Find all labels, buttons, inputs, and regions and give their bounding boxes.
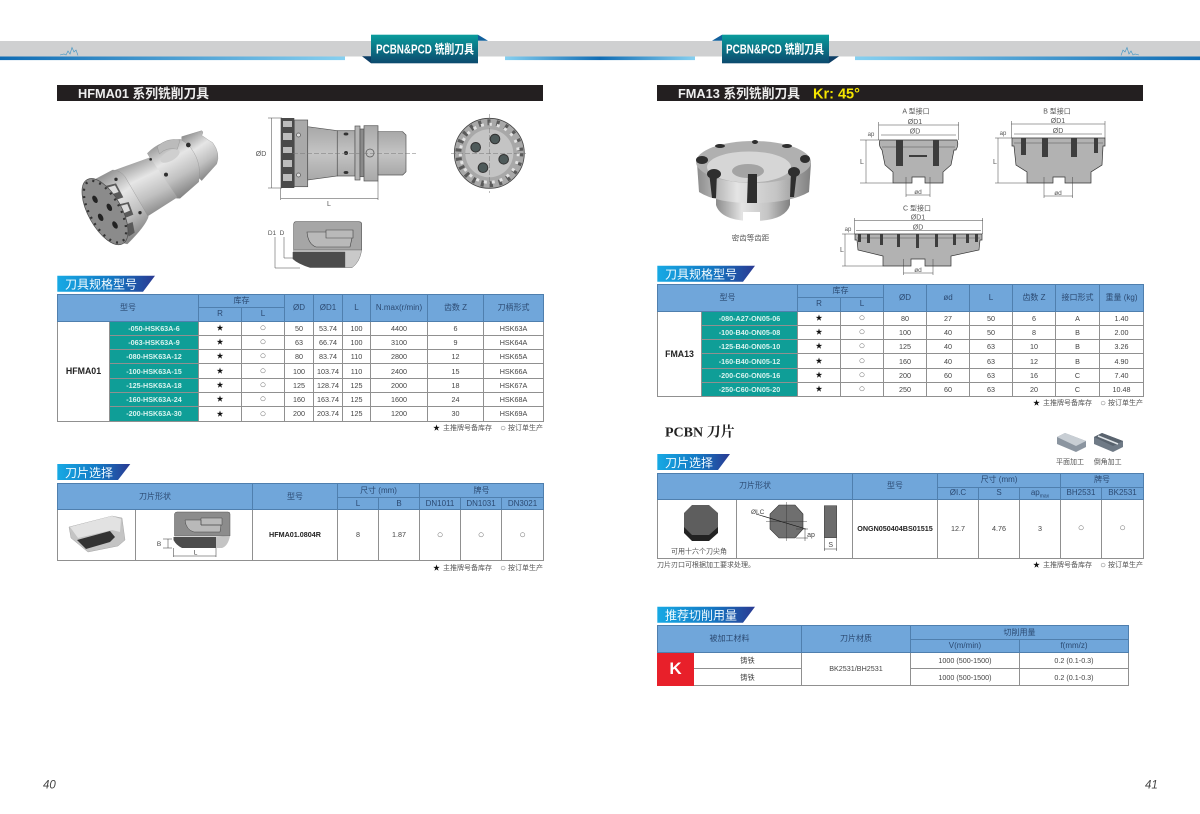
table: recommended cutting parameters [657, 625, 1129, 686]
table: HFMA01 tool specifications: 2000 [391, 381, 407, 390]
table: FMA13 tool specifications: B [1075, 357, 1080, 366]
table: HFMA01 tool specifications: 80 [295, 352, 303, 361]
table: FMA13 tool specifications: ○ [859, 326, 865, 338]
page number 41: 41 [1145, 780, 1158, 792]
table: PCBN insert selection: 12.7 [951, 524, 965, 533]
diagram: HFMA01 insert with B and L dimensions [157, 512, 230, 557]
table: HFMA01 tool specifications: -100-HSK63A-15 [126, 367, 182, 376]
table: FMA13 tool specifications: -080-A27-ON05-06 [719, 314, 780, 323]
table: HFMA01 tool specifications: 100 [350, 338, 362, 347]
table: HFMA01 insert selection: 型号 [287, 492, 303, 500]
diagram: HFMA01 insert detail: D1 [268, 230, 277, 237]
diagram: type B interface: ØD1 [1051, 118, 1065, 125]
diagram: type C interface: ØD1 [911, 214, 925, 222]
table: HFMA01 tool specifications: 6 [454, 324, 458, 333]
table: HFMA01 tool specifications: 18 [452, 381, 460, 390]
table: recommended cutting parameters: 铸铁 [740, 673, 755, 682]
legend: stock note, table 2: ★ 主推牌号备库存 ○ 按订单生产 [433, 563, 543, 574]
header tab: right page [712, 35, 839, 63]
table: HFMA01 tool specifications: 刀柄形式 [498, 303, 530, 312]
table: recommended cutting parameters: 刀片材质 [840, 634, 872, 643]
table: FMA13 tool specifications: 50 [987, 328, 995, 337]
table: HFMA01 tool specifications: -200-HSK63A-30 [126, 409, 182, 418]
table: HFMA01 tool specifications: L [354, 303, 359, 312]
table: HFMA01 tool specifications: ★ [216, 396, 224, 403]
table: HFMA01 tool specifications: HSK66A [500, 367, 527, 376]
table: FMA13 tool specifications: 2.00 [1114, 328, 1128, 337]
table: HFMA01 tool specifications: HFMA01 [66, 366, 101, 376]
photo: HFMA01 milling tool [73, 131, 218, 252]
table: FMA13 tool specifications: ★ [816, 386, 822, 393]
table: FMA13 tool specifications: 1.40 [1114, 314, 1128, 323]
table: FMA13 tool specifications: 63 [987, 371, 995, 380]
table: HFMA01 tool specifications: ★ [216, 382, 224, 389]
table: FMA13 tool specifications: ★ [816, 372, 822, 379]
header tab: left page: PCBN&PCD 铣削刀具 [376, 42, 474, 56]
diagram: HFMA01 side view with dimensions: ØD [256, 151, 266, 158]
diagram: HFMA01 side view with dimensions: L [327, 201, 331, 208]
table: HFMA01 tool specifications: R [217, 309, 223, 318]
heading: PCBN inserts: PCBN 刀片 [665, 424, 735, 440]
icon: chamfered edge insert: 倒角加工 [1094, 457, 1122, 466]
table: PCBN insert selection: 尺寸 (mm) [981, 475, 1017, 484]
section label: tool spec, right: 刀具规格型号 [665, 266, 737, 282]
header tab: right page: PCBN&PCD 铣削刀具 [726, 42, 824, 56]
diagram: octagonal insert top and side view: S [828, 542, 833, 549]
diagram: HFMA01 insert detail [268, 222, 362, 268]
table: FMA13 tool specifications: ★ [816, 329, 822, 336]
table: HFMA01 insert selection: 刀片形状 [139, 492, 171, 500]
title bar: FMA13 series [657, 85, 1143, 102]
icon: waveform left [60, 48, 78, 56]
table: HFMA01 tool specifications: 128.74 [317, 381, 339, 390]
table: HFMA01 insert selection: DN1031 [466, 498, 496, 508]
table: FMA13 tool specifications: ød [943, 293, 953, 302]
table: HFMA01 tool specifications: ○ [260, 350, 266, 362]
section label: insert choice, left: 刀片选择 [65, 466, 113, 480]
section label: recommended cutting parameters [657, 607, 755, 623]
diagram: type A interface: ØD1 [908, 119, 922, 126]
table: HFMA01 tool specifications: HSK69A [500, 409, 527, 418]
table: FMA13 tool specifications: 200 [899, 371, 911, 380]
diagram: type A interface: ød [914, 189, 922, 196]
table: HFMA01 tool specifications: 110 [351, 367, 362, 376]
table: PCBN insert selection: ONGN050404BS01515 [857, 524, 933, 533]
legend: stock note, table 1: ★ 主推牌号备库存 ○ 按订单生产 [433, 423, 543, 434]
table: HFMA01 tool specifications: 203.74 [317, 409, 339, 418]
diagram: type B interface: ØD [1053, 128, 1063, 135]
table: HFMA01 tool specifications: ★ [216, 368, 224, 375]
table: PCBN insert selection: 型号 [887, 481, 903, 490]
table: FMA13 tool specifications: -200-C60-ON05-16 [719, 371, 780, 380]
table: PCBN insert selection [657, 473, 1144, 559]
table: HFMA01 insert selection: 尺寸 (mm) [360, 486, 397, 494]
table: HFMA01 tool specifications: 103.74 [317, 367, 339, 376]
table: PCBN insert selection: 刀片形状 [739, 481, 771, 490]
table: HFMA01 tool specifications: 50 [295, 324, 303, 333]
section label: recommended cutting parameters: 推荐切削用量 [665, 608, 737, 622]
table: FMA13 tool specifications: 齿数 Z [1022, 293, 1046, 302]
table: HFMA01 tool specifications: 12 [452, 352, 460, 361]
photo: octagonal PCBN insert [671, 505, 727, 556]
table: HFMA01 tool specifications [57, 294, 544, 422]
table: PCBN insert selection: BK2531 [1108, 488, 1137, 497]
table: FMA13 tool specifications: 63 [987, 357, 995, 366]
table: recommended cutting parameters: 被加工材料 [710, 634, 750, 643]
table: HFMA01 tool specifications: ★ [216, 353, 224, 360]
table: FMA13 tool specifications: 接口形式 [1062, 293, 1094, 302]
table: HFMA01 tool specifications: -160-HSK63A-24 [126, 395, 182, 404]
table: HFMA01 tool specifications: 30 [452, 409, 460, 418]
diagram: octagonal insert top and side view [751, 502, 837, 551]
table: FMA13 tool specifications: B [1075, 328, 1080, 337]
table: HFMA01 tool specifications: ○ [260, 336, 266, 348]
table: HFMA01 insert selection: ○ [519, 528, 526, 540]
table: HFMA01 tool specifications: 125 [350, 409, 362, 418]
table: HFMA01 tool specifications: HSK65A [500, 352, 527, 361]
table: FMA13 tool specifications: A [1075, 314, 1080, 323]
table: HFMA01 tool specifications: HSK68A [500, 395, 527, 404]
table: HFMA01 tool specifications: L [261, 309, 265, 318]
table: HFMA01 insert selection [57, 483, 544, 561]
table: HFMA01 tool specifications: -080-HSK63A-12 [126, 352, 182, 361]
table: HFMA01 tool specifications: ○ [260, 379, 266, 391]
table: FMA13 tool specifications: 6 [1032, 314, 1036, 323]
table: recommended cutting parameters: 0.2 (0.1-0.3) [1054, 656, 1094, 665]
section label: insert choice, left [57, 464, 130, 480]
diagram: HFMA01 insert with B and L dimensions: L [194, 550, 198, 556]
table: HFMA01 tool specifications: 110 [351, 352, 362, 361]
table: FMA13 tool specifications: 3.26 [1114, 342, 1128, 351]
icon: waveform right [1121, 48, 1139, 56]
table: FMA13 tool specifications: 60 [944, 371, 952, 380]
table: HFMA01 tool specifications: 125 [293, 381, 305, 390]
table: HFMA01 insert selection: ○ [437, 528, 443, 540]
table: HFMA01 tool specifications: 型号 [120, 303, 136, 312]
table: HFMA01 insert selection: L [356, 498, 360, 508]
table: FMA13 tool specifications: -125-B40-ON05-10 [719, 342, 780, 351]
photo: FMA13 face mill [696, 140, 811, 221]
table: FMA13 tool specifications: C [1075, 385, 1080, 394]
table: recommended cutting parameters: 0.2 (0.1-0.3) [1054, 673, 1094, 682]
table: FMA13 tool specifications: 10.48 [1112, 385, 1130, 394]
diagram: type C interface: ap [845, 227, 852, 233]
table: HFMA01 tool specifications: 200 [293, 409, 305, 418]
table: HFMA01 tool specifications: 4400 [391, 324, 407, 333]
table: FMA13 tool specifications: FMA13 [665, 349, 694, 359]
table: FMA13 tool specifications: ★ [816, 315, 822, 322]
table: PCBN insert selection: ○ [1078, 522, 1084, 534]
caption: equal pitch: 密齿等齿距 [732, 232, 770, 242]
table: HFMA01 tool specifications: 2400 [391, 367, 407, 376]
legend: stock note, table 4: ★ 主推牌号备库存 ○ 按订单生产 [1033, 560, 1143, 571]
table: PCBN insert selection: ○ [1119, 522, 1126, 534]
table: HFMA01 tool specifications: 9 [454, 338, 458, 347]
table: FMA13 tool specifications: ★ [816, 358, 822, 365]
diagram: type C interface: C 型接口 [903, 204, 931, 212]
table: FMA13 tool specifications: ○ [859, 340, 865, 352]
diagram: type A interface [860, 106, 959, 197]
table: PCBN insert selection: S [996, 488, 1002, 497]
table: recommended cutting parameters: 铸铁 [740, 656, 755, 665]
table: PCBN insert selection: 牌号 [1094, 475, 1110, 484]
table: HFMA01 tool specifications: 1600 [391, 395, 407, 404]
table: recommended cutting parameters: V(m/min) [949, 641, 981, 650]
table: HFMA01 tool specifications: HSK64A [500, 338, 527, 347]
table: recommended cutting parameters: f(mm/z) [1060, 641, 1088, 650]
table: HFMA01 tool specifications: 齿数 Z [444, 303, 467, 312]
note: edge treatment: 刀片刃口可根据加工要求处理。 [657, 562, 755, 569]
table: HFMA01 tool specifications: 100 [293, 367, 305, 376]
diagram: type A interface: L [860, 159, 864, 166]
icon: flat edge insert: 平面加工 [1056, 457, 1084, 466]
table: FMA13 tool specifications: ○ [859, 355, 865, 367]
table: FMA13 tool specifications: 100 [899, 328, 911, 337]
table: FMA13 tool specifications: 50 [987, 314, 995, 323]
table: FMA13 tool specifications: 40 [944, 357, 952, 366]
table: HFMA01 insert selection: DN1011 [426, 498, 454, 508]
header band: right page [600, 41, 1200, 60]
title bar: HFMA01 series: HFMA01 系列铣削刀具 [78, 86, 209, 101]
table: FMA13 tool specifications: 27 [944, 314, 952, 323]
diagram: type B interface [993, 106, 1105, 198]
table: recommended cutting parameters: 1000 (500-1500) [938, 673, 992, 682]
table: PCBN insert selection: BH2531 [1067, 488, 1095, 497]
diagram: type C interface: L [840, 247, 844, 254]
icon: chamfered edge insert [1094, 433, 1123, 466]
table: PCBN insert selection: 4.76 [992, 524, 1006, 533]
table: FMA13 tool specifications: ○ [859, 369, 865, 381]
table: HFMA01 insert selection: 牌号 [474, 486, 490, 494]
table: FMA13 tool specifications: 40 [944, 342, 952, 351]
table: FMA13 tool specifications: 60 [944, 385, 952, 394]
table: HFMA01 insert selection: ○ [478, 528, 484, 540]
table: recommended cutting parameters: BK2531/BH2531 [829, 664, 883, 673]
table: HFMA01 tool specifications: ★ [216, 411, 224, 418]
table: PCBN insert selection: ØI.C [950, 488, 966, 497]
table: recommended cutting parameters: K [669, 659, 682, 678]
table: FMA13 tool specifications: 16 [1030, 371, 1038, 380]
table: HFMA01 tool specifications: 160 [293, 395, 305, 404]
table: HFMA01 insert selection: HFMA01.0804R [269, 530, 321, 539]
table: HFMA01 tool specifications: 163.74 [317, 395, 339, 404]
table: FMA13 tool specifications: ○ [859, 383, 865, 395]
table: FMA13 tool specifications: 型号 [720, 293, 736, 302]
table: HFMA01 tool specifications: 3100 [391, 338, 407, 347]
table: FMA13 tool specifications: ØD [899, 293, 911, 302]
table: FMA13 tool specifications: -160-B40-ON05-12 [719, 357, 780, 366]
table: FMA13 tool specifications: 63 [987, 385, 995, 394]
table: HFMA01 insert selection: 1.87 [392, 530, 406, 539]
table: FMA13 tool specifications: 7.40 [1114, 371, 1128, 380]
table: FMA13 tool specifications: ○ [859, 312, 865, 324]
diagram: type B interface: ap [1000, 131, 1007, 137]
table: HFMA01 tool specifications: 125 [350, 381, 362, 390]
table: HFMA01 tool specifications: HSK63A [500, 324, 527, 333]
table: FMA13 tool specifications: R [816, 299, 822, 308]
table: FMA13 tool specifications: 63 [987, 342, 995, 351]
table: HFMA01 tool specifications: ○ [260, 408, 266, 420]
icon: flat edge insert [1056, 433, 1086, 466]
table: HFMA01 tool specifications: 53.74 [319, 324, 337, 333]
title bar: HFMA01 series [57, 85, 543, 101]
section label: tool spec, left: 刀具规格型号 [65, 276, 137, 292]
table: HFMA01 tool specifications: ○ [260, 365, 266, 377]
section label: insert choice, right: 刀片选择 [665, 456, 713, 470]
table: HFMA01 tool specifications: 63 [295, 338, 303, 347]
header band: left page [0, 41, 600, 60]
table: HFMA01 insert selection: B [396, 498, 402, 508]
table: HFMA01 tool specifications: ★ [216, 325, 224, 332]
table: FMA13 tool specifications: 8 [1032, 328, 1036, 337]
table: FMA13 tool specifications: 10 [1030, 342, 1038, 351]
table: FMA13 tool specifications: 250 [899, 385, 911, 394]
table: FMA13 tool specifications: ★ [816, 343, 822, 350]
table: HFMA01 tool specifications: -050-HSK63A-6 [128, 324, 180, 333]
table: HFMA01 tool specifications: -063-HSK63A-9 [128, 338, 180, 347]
table: FMA13 tool specifications: 4.90 [1114, 357, 1128, 366]
diagram: type C interface [840, 204, 983, 275]
table: FMA13 tool specifications: 库存 [832, 286, 848, 295]
table: FMA13 tool specifications: 12 [1030, 357, 1038, 366]
table: FMA13 tool specifications: 80 [901, 314, 909, 323]
table: FMA13 tool specifications: 160 [899, 357, 911, 366]
diagram: HFMA01 insert detail: D [280, 230, 285, 237]
table: HFMA01 tool specifications: 100 [350, 324, 362, 333]
table: HFMA01 tool specifications: 库存 [234, 296, 250, 305]
table: HFMA01 tool specifications: ○ [260, 393, 266, 405]
diagram: type A interface: A 型接口 [902, 106, 930, 116]
diagram: octagonal insert top and side view: ØI.C [751, 509, 765, 516]
table: HFMA01 tool specifications: 15 [452, 367, 460, 376]
table: HFMA01 tool specifications: ★ [216, 339, 224, 346]
table: FMA13 tool specifications: C [1075, 371, 1080, 380]
diagram: HFMA01 end view [451, 114, 528, 193]
table: HFMA01 tool specifications: 1200 [391, 409, 407, 418]
diagram: type A interface: ap [868, 132, 875, 138]
table: HFMA01 insert selection: DN3021 [508, 498, 537, 508]
diagram: type B interface: B 型接口 [1043, 106, 1071, 116]
table: FMA13 tool specifications: 40 [944, 328, 952, 337]
section label: insert choice, right [657, 454, 730, 470]
table: HFMA01 tool specifications: 66.74 [319, 338, 337, 347]
diagram: type B interface: L [993, 159, 997, 166]
table: FMA13 tool specifications: 重量 (kg) [1106, 293, 1138, 302]
title bar: FMA13 series: FMA13 系列铣削刀具 [678, 86, 800, 101]
photo: octagonal PCBN insert: 可用十六个刀尖角 [671, 546, 727, 556]
table: HFMA01 insert selection: 8 [356, 530, 360, 539]
table: HFMA01 tool specifications: 125 [350, 395, 362, 404]
table: FMA13 tool specifications: L [989, 293, 993, 302]
table: PCBN insert selection: 3 [1038, 524, 1042, 533]
table: HFMA01 tool specifications: ØD [293, 303, 305, 312]
table: FMA13 tool specifications: L [860, 299, 864, 308]
table: FMA13 tool specifications: 20 [1030, 385, 1038, 394]
diagram: HFMA01 insert with B and L dimensions: B [157, 541, 161, 548]
table: FMA13 tool specifications: -100-B40-ON05-08 [719, 328, 780, 337]
table: HFMA01 tool specifications: 24 [452, 395, 460, 404]
section label: tool spec, left [57, 276, 155, 292]
table: recommended cutting parameters: 切削用量 [1004, 628, 1036, 636]
table: FMA13 tool specifications: -250-C60-ON05-20 [719, 385, 780, 394]
table: FMA13 tool specifications [657, 284, 1144, 397]
diagram: type A interface: ØD [910, 128, 920, 136]
table: HFMA01 tool specifications: N.max(r/min) [376, 303, 422, 312]
diagram: HFMA01 side view with dimensions [256, 118, 416, 208]
page number 40: 40 [43, 780, 56, 792]
section label: tool spec, right [657, 266, 755, 282]
photo: HFMA01 insert [69, 516, 125, 552]
table: FMA13 tool specifications: 125 [899, 342, 911, 351]
table: HFMA01 tool specifications: -125-HSK63A-18 [126, 381, 182, 390]
table: FMA13 tool specifications: B [1075, 342, 1080, 351]
diagram: type C interface: ØD [913, 224, 923, 232]
table: HFMA01 tool specifications: ○ [260, 322, 266, 334]
table: HFMA01 tool specifications: ØD1 [320, 303, 336, 312]
table: HFMA01 tool specifications: HSK67A [500, 381, 527, 390]
header tab: left page [362, 35, 488, 63]
table: HFMA01 tool specifications: 2800 [391, 352, 407, 361]
title bar: FMA13 series: Kr: 45° [813, 86, 860, 102]
diagram: type B interface: ød [1054, 190, 1062, 197]
diagram: type C interface: ød [914, 267, 922, 274]
legend: stock note, table 3: ★ 主推牌号备库存 ○ 按订单生产 [1033, 398, 1143, 409]
table: recommended cutting parameters: 1000 (500-1500) [938, 656, 992, 665]
diagram: octagonal insert top and side view: ap [807, 532, 815, 539]
table: HFMA01 tool specifications: 83.74 [319, 352, 337, 361]
